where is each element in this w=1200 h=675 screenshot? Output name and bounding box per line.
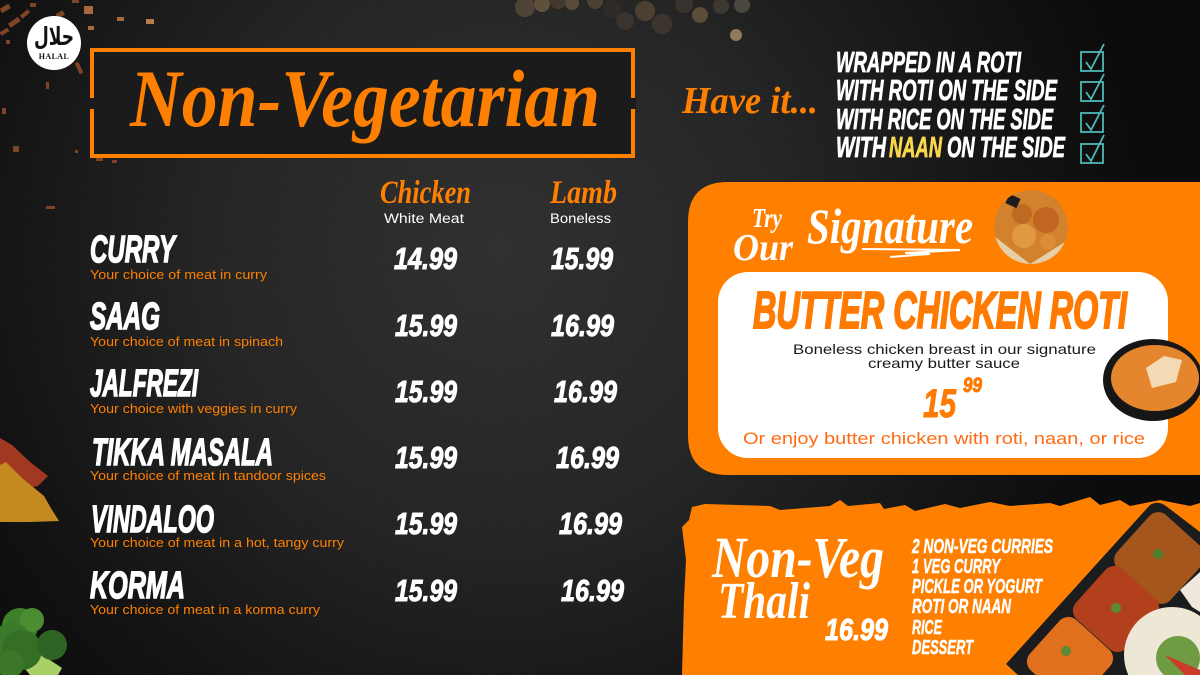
menu row: jalfrezi — [90, 363, 618, 416]
chicken subheader: White Meat — [384, 211, 464, 226]
menu row: jalfrezi: Your choice with veggies in curry — [90, 401, 297, 416]
try our heading: Our — [733, 227, 794, 269]
menu row: jalfrezi: 15.99 — [395, 374, 458, 409]
menu row: curry: 14.99 — [394, 241, 458, 276]
thali contents — [911, 536, 1053, 659]
thali heading: Non-Veg — [711, 525, 884, 590]
menu row: tikka masala: TIKKA MASALA — [92, 432, 273, 474]
thali panel — [682, 497, 1200, 675]
menu row: tikka masala: Your choice of meat in tandoor spices — [90, 468, 326, 483]
alternatives note: Or enjoy butter chicken with roti, naan, or rice — [743, 430, 1145, 448]
menu row: vindaloo — [90, 499, 623, 550]
thali contents: PICKLE OR YOGURT — [912, 576, 1043, 598]
decoration: ground spice heaps left — [0, 438, 59, 522]
food photo: round — [994, 190, 1068, 268]
menu row: vindaloo: 15.99 — [395, 506, 458, 541]
dish description: Boneless chicken breast in our signature — [793, 342, 1096, 357]
decoration: scattered spice bits top left — [0, 0, 154, 209]
menu row: jalfrezi: 16.99 — [554, 374, 618, 409]
signature price: 99 — [963, 374, 982, 397]
butter chicken bowl — [1103, 339, 1200, 421]
thali heading — [711, 525, 884, 630]
menu row: korma — [90, 565, 625, 617]
halal caption: HALAL — [39, 52, 69, 61]
menu row: vindaloo: VINDALOO — [91, 499, 214, 541]
serving options list: WITH — [836, 132, 887, 164]
menu row: korma: 15.99 — [395, 573, 458, 608]
menu row: saag: SAAG — [90, 296, 160, 338]
menu row: saag: 15.99 — [395, 308, 458, 343]
menu row: tikka masala: 15.99 — [395, 440, 458, 475]
decoration: broccoli bottom left — [0, 608, 67, 675]
menu row: korma: KORMA — [90, 565, 185, 607]
menu row: tikka masala: 16.99 — [556, 440, 620, 475]
serving options list: WITH RICE ON THE SIDE — [836, 104, 1054, 136]
price column headers — [380, 175, 617, 226]
menu row: curry: 15.99 — [551, 241, 614, 276]
menu row: tikka masala — [90, 432, 620, 483]
chicken header: Chicken — [380, 175, 471, 211]
menu row: saag: Your choice of meat in spinach — [90, 334, 283, 349]
menu row: saag — [90, 296, 615, 349]
menu row: jalfrezi: JALFREZI — [90, 363, 199, 405]
halal badge — [27, 16, 81, 70]
decoration: peppercorns top center — [515, 0, 750, 41]
dish description — [793, 342, 1096, 371]
menu row: korma: Your choice of meat in a korma curry — [90, 602, 320, 617]
thali contents: ROTI OR NAAN — [912, 596, 1011, 618]
lamb subheader: Boneless — [550, 211, 611, 226]
serving options list: NAAN — [889, 132, 943, 164]
have it heading: Have it... — [681, 80, 818, 122]
serving options list: WITH ROTI ON THE SIDE — [836, 75, 1058, 107]
thali contents: 2 NON-VEG CURRIES — [911, 536, 1053, 558]
menu row: vindaloo: Your choice of meat in a hot, tangy curry — [90, 535, 344, 550]
menu row: curry: Your choice of meat in curry — [90, 267, 267, 282]
serving options list — [836, 47, 1066, 164]
title panel — [89, 50, 636, 156]
try our heading: Try — [752, 203, 783, 233]
menu row: saag: 16.99 — [551, 308, 615, 343]
serving options list: WRAPPED IN A ROTI — [836, 47, 1022, 79]
signature price — [923, 374, 982, 426]
thali contents: DESSERT — [912, 637, 974, 659]
thali contents: RICE — [912, 617, 942, 639]
menu row: korma: 16.99 — [561, 573, 625, 608]
checkboxes — [1081, 44, 1104, 163]
lamb header: Lamb — [549, 175, 617, 211]
signature panel — [688, 182, 1200, 475]
signature price: 15 — [923, 382, 957, 426]
serving options list: ON THE SIDE — [947, 132, 1066, 164]
thali price: 16.99 — [825, 612, 889, 647]
title: Non-Vegetarian — [129, 53, 600, 144]
thali heading: Thali — [718, 573, 810, 630]
menu row: curry: CURRY — [90, 229, 177, 271]
halal arabic mark: حلال — [34, 22, 74, 51]
thali tray photo — [1006, 503, 1200, 675]
menu row: vindaloo: 16.99 — [559, 506, 623, 541]
try our heading — [733, 203, 794, 269]
thali contents: 1 VEG CURRY — [912, 556, 1001, 578]
menu row: curry — [90, 229, 614, 282]
dish description: creamy butter sauce — [868, 356, 1020, 371]
signature heading: Signature — [807, 198, 973, 254]
white card — [718, 272, 1168, 458]
